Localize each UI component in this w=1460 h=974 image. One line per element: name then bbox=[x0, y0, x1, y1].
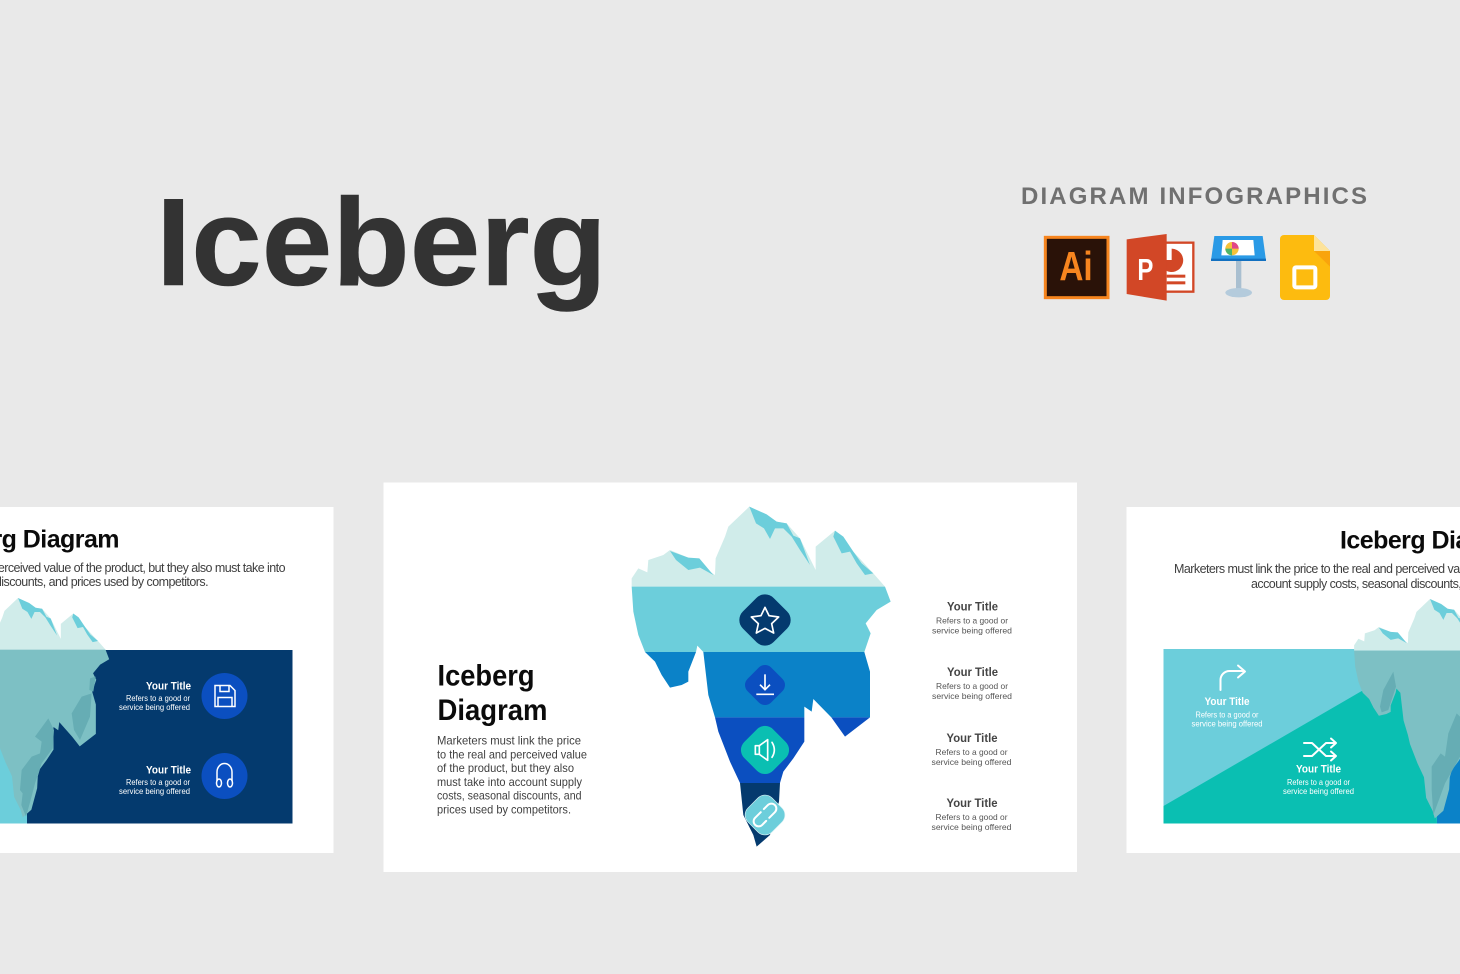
item: support: service being offered bbox=[119, 787, 190, 796]
item: save: Refers to a good or bbox=[126, 694, 190, 703]
label 2: Your Title bbox=[947, 667, 998, 679]
heading: centre slide: Diagram bbox=[438, 694, 548, 727]
text block: centre slide: must take into account supply bbox=[437, 775, 582, 789]
text block: centre slide: to the real and perceived value bbox=[437, 747, 587, 761]
item: shuffle: Refers to a good or bbox=[1287, 778, 1350, 787]
item: save bbox=[119, 673, 248, 719]
icon: star bbox=[734, 589, 796, 651]
label 1: service being offered bbox=[932, 626, 1012, 636]
icon: Keynote bbox=[1211, 236, 1266, 297]
item: turn arrow: Refers to a good or bbox=[1196, 710, 1259, 720]
item: shuffle bbox=[1283, 738, 1354, 796]
item: shuffle: service being offered bbox=[1283, 787, 1354, 796]
text block: right slide bbox=[1174, 562, 1460, 591]
item: turn arrow: Your Title bbox=[1204, 696, 1250, 708]
label 1: Your Title bbox=[947, 602, 998, 614]
icon: PowerPoint bbox=[1127, 234, 1193, 301]
title: Iceberg bbox=[156, 174, 607, 312]
label 4 bbox=[932, 798, 1012, 832]
icon: link bbox=[741, 791, 789, 839]
label 2: Refers to a good or bbox=[936, 681, 1008, 691]
panel: right slide bbox=[1126, 507, 1460, 853]
labels: right column bbox=[932, 602, 1012, 832]
iceberg: layer 2 bbox=[645, 652, 870, 717]
item: save: service being offered bbox=[119, 703, 190, 712]
label 1 bbox=[932, 602, 1012, 636]
iceberg: left bbox=[0, 598, 109, 817]
text block: left slide bbox=[0, 561, 286, 589]
icon: Adobe Illustrator bbox=[1045, 237, 1108, 298]
iceberg: top cap bbox=[632, 507, 885, 587]
text block: centre slide: of the product, but they also bbox=[437, 761, 574, 775]
panel: centre slide bbox=[384, 482, 1077, 872]
item: turn arrow: service being offered bbox=[1192, 720, 1262, 728]
text block: centre slide: Marketers must link the price bbox=[437, 734, 581, 748]
iceberg: layer 1 bbox=[632, 587, 891, 652]
icon: speaker bbox=[736, 721, 794, 779]
label 3: Refers to a good or bbox=[936, 747, 1008, 757]
panel: left slide bbox=[0, 507, 334, 853]
item: shuffle: Your Title bbox=[1296, 764, 1341, 776]
icon: Google Slides bbox=[1280, 235, 1330, 300]
label 2 bbox=[932, 667, 1012, 701]
subtitle: DIAGRAM INFOGRAPHICS bbox=[1021, 183, 1367, 210]
item: turn arrow bbox=[1192, 666, 1262, 728]
iceberg: layer 3 bbox=[715, 717, 870, 783]
item: support bbox=[119, 753, 248, 799]
iceberg: right bbox=[1354, 599, 1460, 818]
label 1: Refers to a good or bbox=[936, 616, 1008, 626]
heading: centre slide: Iceberg bbox=[438, 660, 534, 692]
item: support: Refers to a good or bbox=[126, 778, 190, 787]
label 4: Your Title bbox=[946, 798, 998, 810]
label 3 bbox=[932, 733, 1012, 767]
text block: centre slide: prices used by competitors. bbox=[437, 802, 571, 816]
label 3: Your Title bbox=[946, 733, 998, 745]
label 2: service being offered bbox=[932, 691, 1012, 701]
software icons bbox=[1045, 234, 1330, 301]
icon: PowerPoint: P bbox=[1137, 253, 1153, 287]
iceberg: layer 4 bbox=[740, 783, 780, 847]
heading: centre slide bbox=[438, 660, 548, 727]
label 4: service being offered bbox=[932, 822, 1012, 832]
label 3: service being offered bbox=[932, 757, 1012, 767]
iceberg diagram bbox=[632, 507, 891, 847]
icon: download bbox=[741, 661, 789, 709]
label 4: Refers to a good or bbox=[936, 812, 1008, 822]
text block: centre slide: costs, seasonal discounts, and bbox=[437, 789, 582, 803]
item: support: Your Title bbox=[146, 764, 191, 776]
text block: centre slide bbox=[437, 734, 587, 816]
chart background: left bbox=[0, 650, 292, 824]
icon: Adobe Illustrator: Ai bbox=[1059, 243, 1093, 289]
chart background: right bbox=[1164, 649, 1460, 824]
item: save: Your Title bbox=[146, 680, 191, 692]
